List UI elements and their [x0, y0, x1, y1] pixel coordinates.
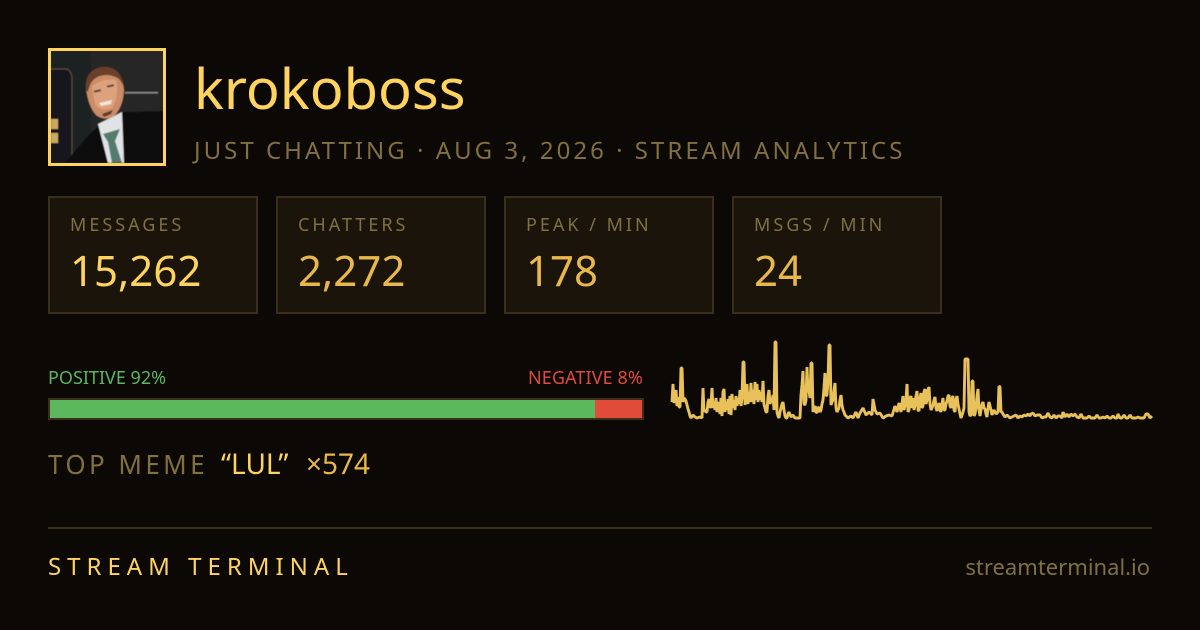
stat card: chatters [276, 196, 486, 314]
sentiment bar [48, 398, 644, 420]
stat card: messages [48, 196, 258, 314]
divider [48, 527, 1152, 529]
avatar [48, 48, 166, 166]
stat card: messages: MESSAGES [70, 213, 184, 237]
stat card: peak per minute [504, 196, 714, 314]
stat card: peak per minute: 178 [526, 242, 598, 299]
top meme [48, 445, 370, 483]
brand: STREAM TERMINAL [48, 550, 354, 583]
stat card: chatters: 2,272 [298, 242, 405, 299]
top meme: TOP MEME [48, 446, 208, 482]
site url: streamterminal.io [965, 552, 1150, 582]
positive label: POSITIVE 92% [48, 366, 166, 390]
stat card: messages: 15,262 [70, 242, 201, 299]
stat card: peak per minute: PEAK / MIN [526, 213, 652, 237]
title: username: krokoboss [194, 50, 466, 126]
negative label: NEGATIVE 8% [528, 366, 643, 390]
stat card: messages per minute: 24 [754, 242, 802, 299]
subtitle: JUST CHATTING · AUG 3, 2026 · STREAM ANALYTICS [194, 134, 905, 167]
stat card: messages per minute: MSGS / MIN [754, 213, 885, 237]
stat card: chatters: CHATTERS [298, 213, 408, 237]
stat card: messages per minute [732, 196, 942, 314]
top meme: ×574 [306, 445, 370, 483]
top meme: “LUL” [221, 445, 288, 483]
